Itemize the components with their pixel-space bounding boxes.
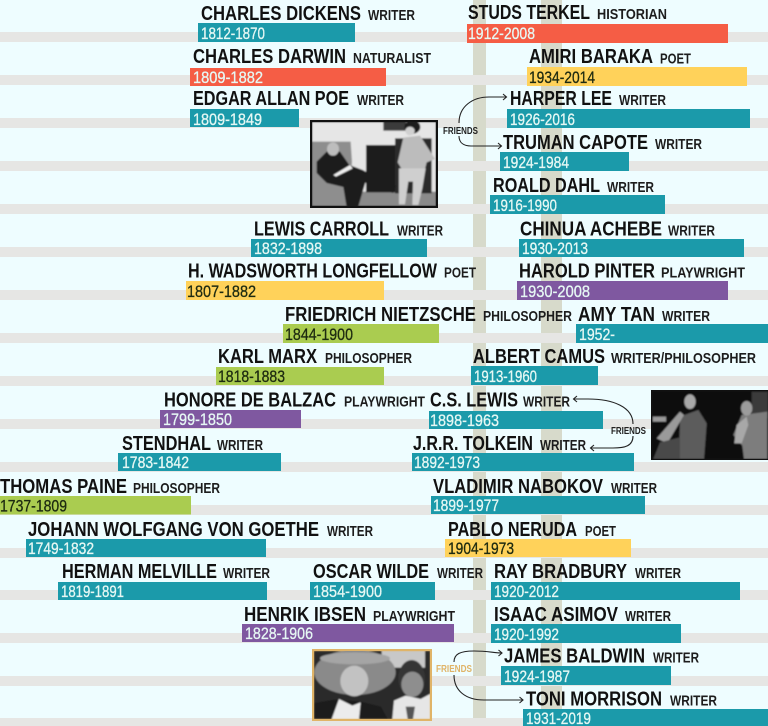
person: Johann Wolfgang von Goethe (26, 518, 373, 558)
person: Karl Marx: 1818-1883 (218, 368, 285, 386)
person: Albert Camus: 1913-1960 (474, 368, 537, 386)
person: Thomas Paine: THOMAS PAINE (0, 475, 127, 498)
person: Chinua Achebe: WRITER (668, 222, 715, 240)
person: Karl Marx (216, 345, 412, 386)
person: Truman Capote: 1924-1984 (503, 154, 569, 172)
person: Thomas Paine: PHILOSOPHER (133, 480, 220, 497)
person: Harold Pinter: 1930-2008 (520, 283, 590, 301)
person: James Baldwin (501, 644, 699, 686)
person: Herman Melville: HERMAN MELVILLE (62, 560, 217, 583)
person: Johann Wolfgang von Goethe: WRITER (327, 523, 373, 540)
person: Charles Dickens (198, 2, 415, 43)
person: Charles Darwin: CHARLES DARWIN (193, 45, 346, 68)
person: Chinua Achebe: 1930-2013 (522, 240, 588, 258)
person: Studs Terkel (467, 1, 728, 43)
person: Pablo Neruda: PABLO NERUDA (448, 518, 577, 541)
person: Oscar Wilde: OSCAR WILDE (313, 560, 429, 583)
person: Truman Capote: TRUMAN CAPOTE (503, 131, 648, 154)
person: Herman Melville: WRITER (223, 565, 270, 582)
person: Thomas Paine: 1737-1809 (0, 498, 67, 516)
person: Pablo Neruda: POET (585, 523, 616, 540)
person: Isaac Asimov: WRITER (625, 608, 671, 625)
person: H. Wadsworth Longfellow: 1807-1882 (187, 283, 256, 301)
photo: Toni Morrison and James Baldwin (312, 649, 432, 721)
person: Truman Capote: WRITER (655, 136, 702, 153)
person: Stendhal: STENDHAL (122, 432, 211, 455)
person: Karl Marx: KARL MARX (218, 345, 317, 368)
person: Amy Tan: 1952- (579, 326, 615, 344)
person: Oscar Wilde: 1854-1900 (313, 583, 382, 601)
person: Friedrich Nietzsche: FRIEDRICH NIETZSCHE (285, 303, 476, 326)
person: Edgar Allan Poe: 1809-1849 (193, 111, 262, 129)
person: J.R.R. Tolkein: WRITER (540, 437, 586, 454)
person: Harper Lee: HARPER LEE (510, 87, 612, 110)
person: Henrik Ibsen: PLAYWRIGHT (373, 608, 455, 625)
person: Stendhal: 1783-1842 (122, 454, 189, 472)
person: Charles Dickens: WRITER (368, 7, 415, 24)
person: Johann Wolfgang von Goethe: JOHANN WOLFGANG VON GOETHE (28, 518, 319, 541)
person: Harper Lee: WRITER (619, 92, 666, 109)
person: Vladimir Nabokov: VLADIMIR NABOKOV (433, 475, 603, 498)
person: Charles Darwin (190, 45, 431, 87)
person: Roald Dahl: ROALD DAHL (493, 174, 600, 197)
person: Studs Terkel: STUDS TERKEL (468, 1, 590, 24)
person: Isaac Asimov: ISAAC ASIMOV (494, 603, 618, 626)
person: Vladimir Nabokov: 1899-1977 (433, 497, 499, 515)
person: H. Wadsworth Longfellow: H. WADSWORTH LONGFELLOW (188, 260, 438, 282)
person: Amiri Baraka: 1934-2014 (529, 69, 595, 87)
person: Vladimir Nabokov: WRITER (611, 480, 657, 497)
person: Henrik Ibsen: 1828-1906 (245, 625, 313, 643)
person: Charles Dickens: CHARLES DICKENS (201, 2, 361, 25)
person: Vladimir Nabokov (431, 475, 657, 515)
person: Pablo Neruda: 1904-1973 (448, 540, 514, 558)
person: Amy Tan: WRITER (662, 308, 710, 325)
annotation: friends, Lewis and Tolkien (574, 396, 646, 451)
person: Friedrich Nietzsche: 1844-1900 (285, 326, 353, 344)
person: Amiri Baraka (527, 45, 747, 87)
person: Charles Darwin: 1809-1882 (193, 69, 263, 87)
annotation: friends, Morrison and Baldwin (436, 650, 523, 703)
person: C.S. Lewis (429, 388, 603, 430)
annotation: friends, Lewis and Tolkien: FRIENDS (611, 425, 646, 437)
person: Studs Terkel: HISTORIAN (597, 6, 667, 23)
annotation: friends, Morrison and Baldwin: FRIENDS (436, 663, 472, 675)
person: Friedrich Nietzsche (283, 303, 572, 344)
person: Stendhal: WRITER (217, 437, 263, 454)
person: H. Wadsworth Longfellow (186, 260, 476, 301)
person: Amy Tan: AMY TAN (578, 303, 655, 326)
person: H. Wadsworth Longfellow: POET (444, 264, 476, 282)
person: Johann Wolfgang von Goethe: 1749-1832 (28, 540, 94, 558)
person: Lewis Carroll (251, 218, 443, 258)
person: Karl Marx: PHILOSOPHER (325, 350, 412, 367)
person: Lewis Carroll: WRITER (397, 222, 443, 240)
person: Lewis Carroll: 1832-1898 (254, 240, 322, 258)
person: Edgar Allan Poe (190, 87, 404, 129)
person: Stendhal (118, 432, 281, 472)
person: Isaac Asimov: 1920-1992 (494, 626, 559, 644)
person: Truman Capote (500, 131, 702, 172)
person: Harper Lee: 1926-2016 (510, 111, 575, 129)
person: Honore de Balzac: HONORE DE BALZAC (164, 388, 336, 412)
person: Toni Morrison: WRITER (670, 692, 717, 710)
person: Oscar Wilde (310, 560, 483, 601)
person: Honore de Balzac: PLAYWRIGHT (344, 394, 425, 410)
person: James Baldwin: 1924-1987 (504, 668, 570, 686)
person: Roald Dahl (490, 174, 665, 215)
person: Amiri Baraka: AMIRI BARAKA (529, 45, 653, 68)
person: Studs Terkel: 1912-2008 (468, 25, 535, 43)
person: Edgar Allan Poe: WRITER (357, 92, 404, 109)
person: C.S. Lewis: C.S. LEWIS (430, 388, 518, 412)
person: Harper Lee (507, 87, 750, 129)
person: Honore de Balzac: 1799-1850 (163, 411, 232, 429)
annotation: friends, Capote and Lee: FRIENDS (443, 125, 478, 137)
person: Chinua Achebe: CHINUA ACHEBE (520, 218, 662, 240)
person: Harold Pinter: PLAYWRIGHT (661, 264, 745, 282)
annotation: friends, Capote and Lee (443, 94, 506, 149)
person: Harold Pinter: HAROLD PINTER (519, 260, 655, 282)
person: Lewis Carroll: LEWIS CARROLL (254, 218, 389, 240)
person: Ray Bradbury: RAY BRADBURY (494, 560, 627, 583)
person: J.R.R. Tolkein (412, 432, 634, 472)
person: Ray Bradbury (491, 560, 740, 601)
person: Roald Dahl: WRITER (607, 179, 654, 196)
person: Charles Dickens: 1812-1870 (201, 25, 265, 43)
person: Amiri Baraka: POET (660, 50, 691, 68)
person: Herman Melville: 1819-1891 (61, 583, 124, 601)
person: C.S. Lewis: WRITER (523, 394, 570, 410)
person: Amy Tan (576, 303, 768, 344)
person: C.S. Lewis: 1898-1963 (430, 412, 499, 430)
person: Herman Melville (58, 560, 270, 601)
photo: Truman Capote and Harper Lee (310, 120, 438, 208)
person: Harold Pinter (517, 260, 745, 301)
person: Henrik Ibsen (242, 603, 455, 643)
person: Toni Morrison: TONI MORRISON (526, 688, 662, 710)
person: Henrik Ibsen: HENRIK IBSEN (244, 603, 366, 626)
person: Albert Camus: ALBERT CAMUS (473, 345, 605, 368)
person: Isaac Asimov (491, 603, 681, 644)
person: Ray Bradbury: WRITER (635, 565, 681, 582)
person: Friedrich Nietzsche: PHILOSOPHER (483, 308, 572, 325)
person: Thomas Paine (0, 475, 220, 516)
person: Albert Camus (471, 345, 756, 386)
person: Roald Dahl: 1916-1990 (493, 197, 557, 215)
person: James Baldwin: JAMES BALDWIN (504, 644, 645, 668)
person: Edgar Allan Poe: EDGAR ALLAN POE (193, 87, 349, 110)
person: Pablo Neruda (445, 518, 631, 558)
person: James Baldwin: WRITER (653, 650, 699, 666)
person: J.R.R. Tolkein: 1892-1973 (414, 454, 480, 472)
person: Ray Bradbury: 1920-2012 (494, 583, 559, 601)
person: Oscar Wilde: WRITER (437, 565, 483, 582)
person: Charles Darwin: NATURALIST (353, 50, 431, 67)
person: J.R.R. Tolkein: J.R.R. TOLKEIN (413, 432, 533, 455)
photo: Lewis and Tolkien (651, 390, 768, 460)
person: Chinua Achebe (519, 218, 744, 258)
person: Toni Morrison (523, 688, 768, 726)
person: Honore de Balzac (160, 388, 425, 429)
